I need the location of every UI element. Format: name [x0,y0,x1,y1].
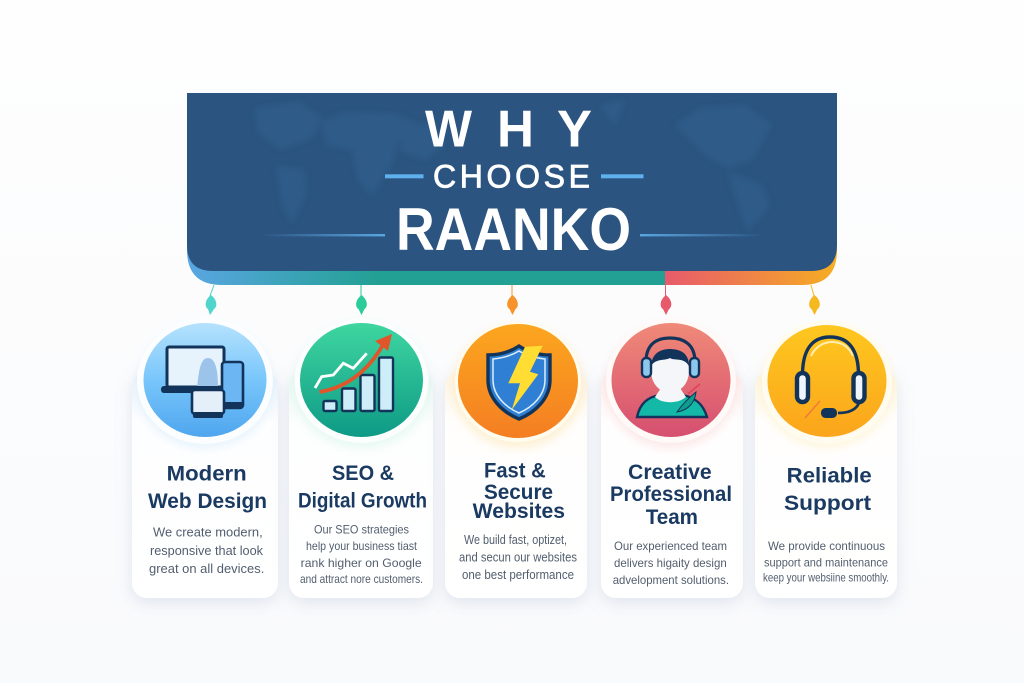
card: seo and digital growth [289,319,433,598]
connector pins [206,285,820,315]
description: one best performance [462,567,574,582]
navy banner panel [187,93,837,271]
icon: growth chart [294,319,430,448]
card panel [132,372,278,598]
heading: Digital Growth [298,490,427,513]
heading: Creative [628,461,712,484]
description: delivers higaity design [614,556,727,570]
heading: Team [646,506,698,529]
description: rank higher on Google [301,556,422,570]
description [763,539,889,585]
heading: Modern [167,463,247,486]
description: Our experienced team [614,539,727,553]
description: responsive that look [150,543,263,558]
heading: Support [784,492,871,515]
icon: shield with bolt [453,322,583,448]
heading: Secure [484,481,553,504]
heading [784,465,872,515]
description [459,532,577,582]
pin 5 [809,285,820,315]
description [613,539,729,587]
title: why: Y [557,101,592,159]
description: We build fast, optizet, [464,532,567,547]
description: help your business tiast [306,539,418,553]
title: raanko: RAANKO [396,196,631,263]
world map texture [255,100,772,232]
pin 1 [206,285,216,315]
heading: Professional [610,483,732,506]
raanko side rules [260,234,765,236]
description: We create modern, [153,525,263,540]
description [300,522,423,586]
title: why: W [425,101,473,159]
pin 3 [507,285,518,315]
heading: SEO & [332,462,394,485]
card panel [289,372,433,598]
card panel [601,372,743,598]
heading: Websites [473,500,565,523]
title: choose: CHOOSE [433,159,590,195]
title: why [425,101,592,159]
heading: Web Design [148,490,267,513]
icon: team member with headphones [606,319,736,448]
description [149,525,264,576]
choose side dashes [385,174,644,178]
card: modern web design [132,318,278,598]
card: fast and secure websites [445,322,587,598]
icon: headset [762,320,892,447]
description: keep your websiine smoothly. [763,571,889,585]
heading: Fast & [484,460,546,483]
description: support and maintenance [764,556,888,570]
heading [148,463,267,513]
card panel [445,372,587,598]
pin 4 [661,285,671,315]
description: Our SEO strategies [314,522,409,536]
heading [298,462,427,513]
card panel [755,372,897,598]
banner [187,93,837,285]
description: and secun our websites [459,550,577,565]
description: great on all devices. [149,561,264,576]
description: and attract nore customers. [300,572,423,586]
heading [473,460,565,523]
pin 2 [356,285,367,315]
description: advelopment solutions. [613,573,729,587]
title: why: H [497,101,534,159]
heading: Reliable [787,465,872,488]
card: creative professional team [601,319,743,598]
description: We provide continuous [768,539,885,553]
icon: devices [137,318,273,448]
coloured band under banner [187,240,837,285]
heading [610,461,732,529]
card: reliable support [755,320,897,598]
